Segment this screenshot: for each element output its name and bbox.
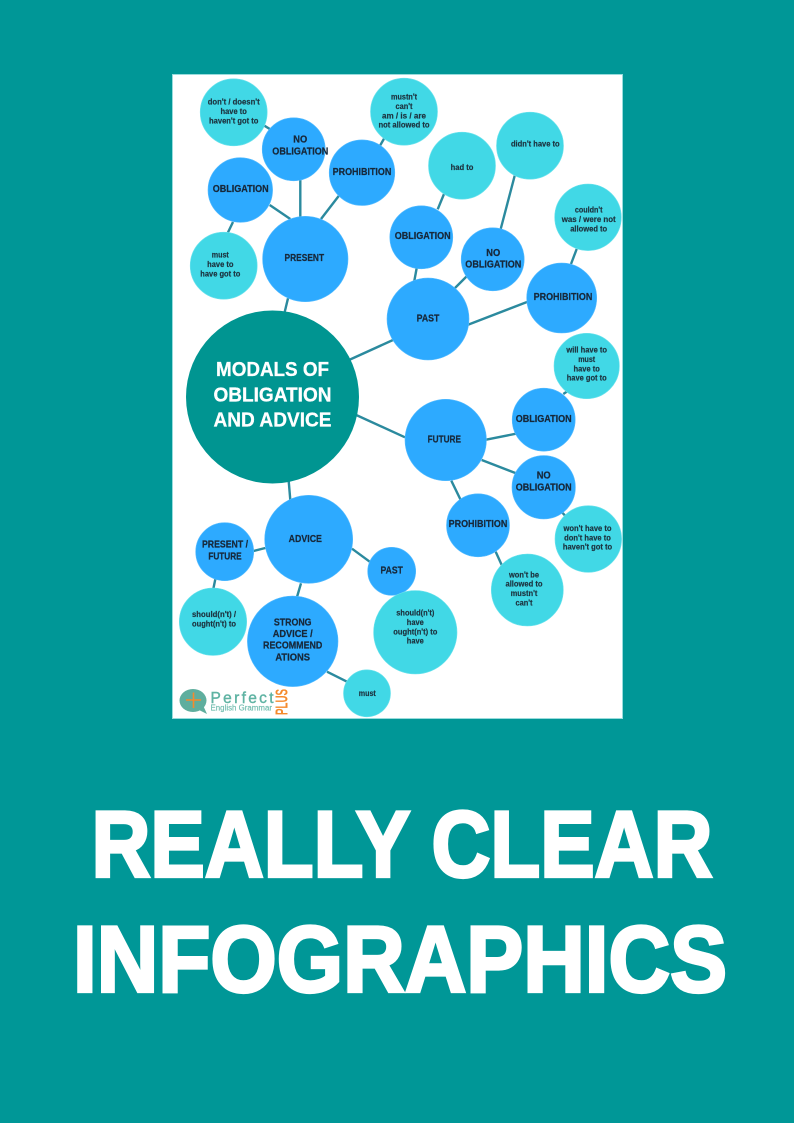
node: strong advice / recommendations: RECOMMEND (263, 640, 323, 652)
detail: should have: have (407, 637, 424, 646)
node: present obligation (208, 158, 273, 222)
detail: won't be allowed to (491, 554, 563, 626)
detail: couldn't: was / were not (561, 215, 616, 224)
detail: should have (374, 591, 457, 674)
node: future prohibition (446, 494, 510, 557)
central node: modals of obligation and advice: MODALS OF (216, 358, 329, 381)
node: present / future: FUTURE (208, 550, 242, 562)
node: past (387, 278, 469, 360)
node: advice past (368, 547, 416, 595)
detail: won't be allowed to: won't be (508, 570, 540, 579)
node: past prohibition: PROHIBITION (534, 291, 592, 303)
node: past no obligation: NO (486, 247, 500, 259)
detail: couldn't: couldn't (575, 206, 603, 215)
node: present prohibition (329, 140, 395, 206)
node: past obligation (390, 206, 453, 269)
detail: won't have to: don't have to (564, 533, 611, 542)
node: strong advice / recommendations: ADVICE / (273, 628, 313, 640)
logo: perfect english grammar plus (180, 689, 292, 715)
detail: didn't have to (496, 112, 564, 179)
connector lines (213, 126, 577, 682)
icon: speech bubble with plus (180, 689, 207, 714)
node: present prohibition: PROHIBITION (333, 166, 391, 178)
detail: should ought to: should(n't) / (192, 610, 237, 619)
detail: had to (428, 132, 496, 199)
detail: mustn't: am / is / are (382, 111, 427, 120)
detail: had to: had to (451, 163, 473, 172)
detail: don't have to: don't / doesn't (208, 98, 260, 107)
detail: won't be allowed to: mustn't (511, 589, 538, 598)
detail: should have: should(n't) (396, 609, 435, 618)
title: really clear infographics: REALLY CLEAR (92, 792, 712, 896)
node: present (263, 216, 348, 302)
detail: couldn't (555, 184, 621, 251)
logo: perfect english grammar plus: PLUS (272, 689, 292, 715)
node: future (405, 399, 486, 481)
detail: must have to (190, 232, 257, 299)
central node: modals of obligation and advice: OBLIGATION (214, 384, 332, 406)
detail: must have to: have to (207, 260, 234, 269)
node: present no obligation: NO (293, 134, 307, 146)
node: present / future: PRESENT / (202, 539, 248, 551)
logo: perfect english grammar plus: English Grammar (210, 703, 272, 712)
detail: couldn't: allowed to (570, 224, 607, 233)
detail: won't have to: haven't got to (563, 543, 612, 552)
detail: must (344, 670, 390, 717)
node: future no obligation (512, 456, 575, 519)
detail: won't be allowed to: allowed to (506, 580, 543, 589)
detail: will have to: have to (574, 364, 600, 373)
node: future obligation: OBLIGATION (516, 413, 572, 425)
node: present no obligation (262, 118, 328, 181)
node: advice past: PAST (381, 564, 403, 576)
title: really clear infographics: INFOGRAPHICS (73, 906, 727, 1012)
node: advice (265, 495, 353, 583)
detail: mustn't: mustn't (391, 93, 417, 102)
node: past obligation: OBLIGATION (395, 230, 451, 242)
logo: perfect english grammar plus: Perfect (210, 690, 274, 707)
detail: should ought to: ought(n't) to (192, 619, 236, 628)
detail: must have to: have got to (200, 269, 240, 278)
detail: should have: ought(n't) to (393, 627, 437, 636)
node: past no obligation (461, 228, 524, 291)
detail: mustn't: not allowed to (378, 121, 430, 130)
detail: should have: have (407, 618, 424, 627)
detail: will have to: have got to (567, 374, 607, 383)
detail: should ought to (179, 588, 247, 655)
detail: won't have to: won't have to (563, 524, 612, 533)
detail: mustn't (370, 78, 438, 145)
node: present obligation: OBLIGATION (213, 183, 269, 195)
node: past prohibition (527, 263, 597, 333)
detail: must have to: must (212, 251, 229, 260)
node: past: PAST (417, 313, 440, 325)
detail: will have to: will have to (565, 346, 607, 355)
node: future obligation (512, 388, 575, 451)
central node: modals of obligation and advice: AND ADVICE (214, 408, 332, 432)
node: future: FUTURE (428, 434, 461, 446)
detail: didn't have to: didn't have to (511, 140, 560, 149)
node: strong advice / recommendations: ATIONS (275, 651, 310, 663)
node: present / future (196, 523, 254, 581)
detail: will have to (554, 333, 619, 399)
node: future no obligation: NO (537, 469, 551, 481)
node: present: PRESENT (285, 252, 325, 264)
detail: won't have to (555, 506, 622, 572)
detail: must: must (359, 689, 376, 698)
detail: mustn't: can't (396, 102, 413, 111)
node: strong advice / recommendations (247, 596, 338, 687)
central node: modals of obligation and advice (186, 310, 359, 484)
detail: will have to: must (578, 355, 595, 364)
detail: don't have to (200, 79, 267, 146)
title: really clear infographics (73, 792, 727, 1012)
node: advice: ADVICE (289, 533, 322, 545)
detail: don't have to: have to (221, 107, 247, 116)
node: future prohibition: PROHIBITION (449, 518, 507, 530)
node: strong advice / recommendations: STRONG (274, 616, 312, 628)
node: past no obligation: OBLIGATION (465, 259, 521, 271)
detail: don't have to: haven't got to (209, 116, 258, 125)
detail: won't be allowed to: can't (516, 598, 533, 607)
node: future no obligation: OBLIGATION (516, 481, 572, 493)
panel: mind map poster (172, 74, 622, 718)
node: present no obligation: OBLIGATION (272, 145, 328, 157)
